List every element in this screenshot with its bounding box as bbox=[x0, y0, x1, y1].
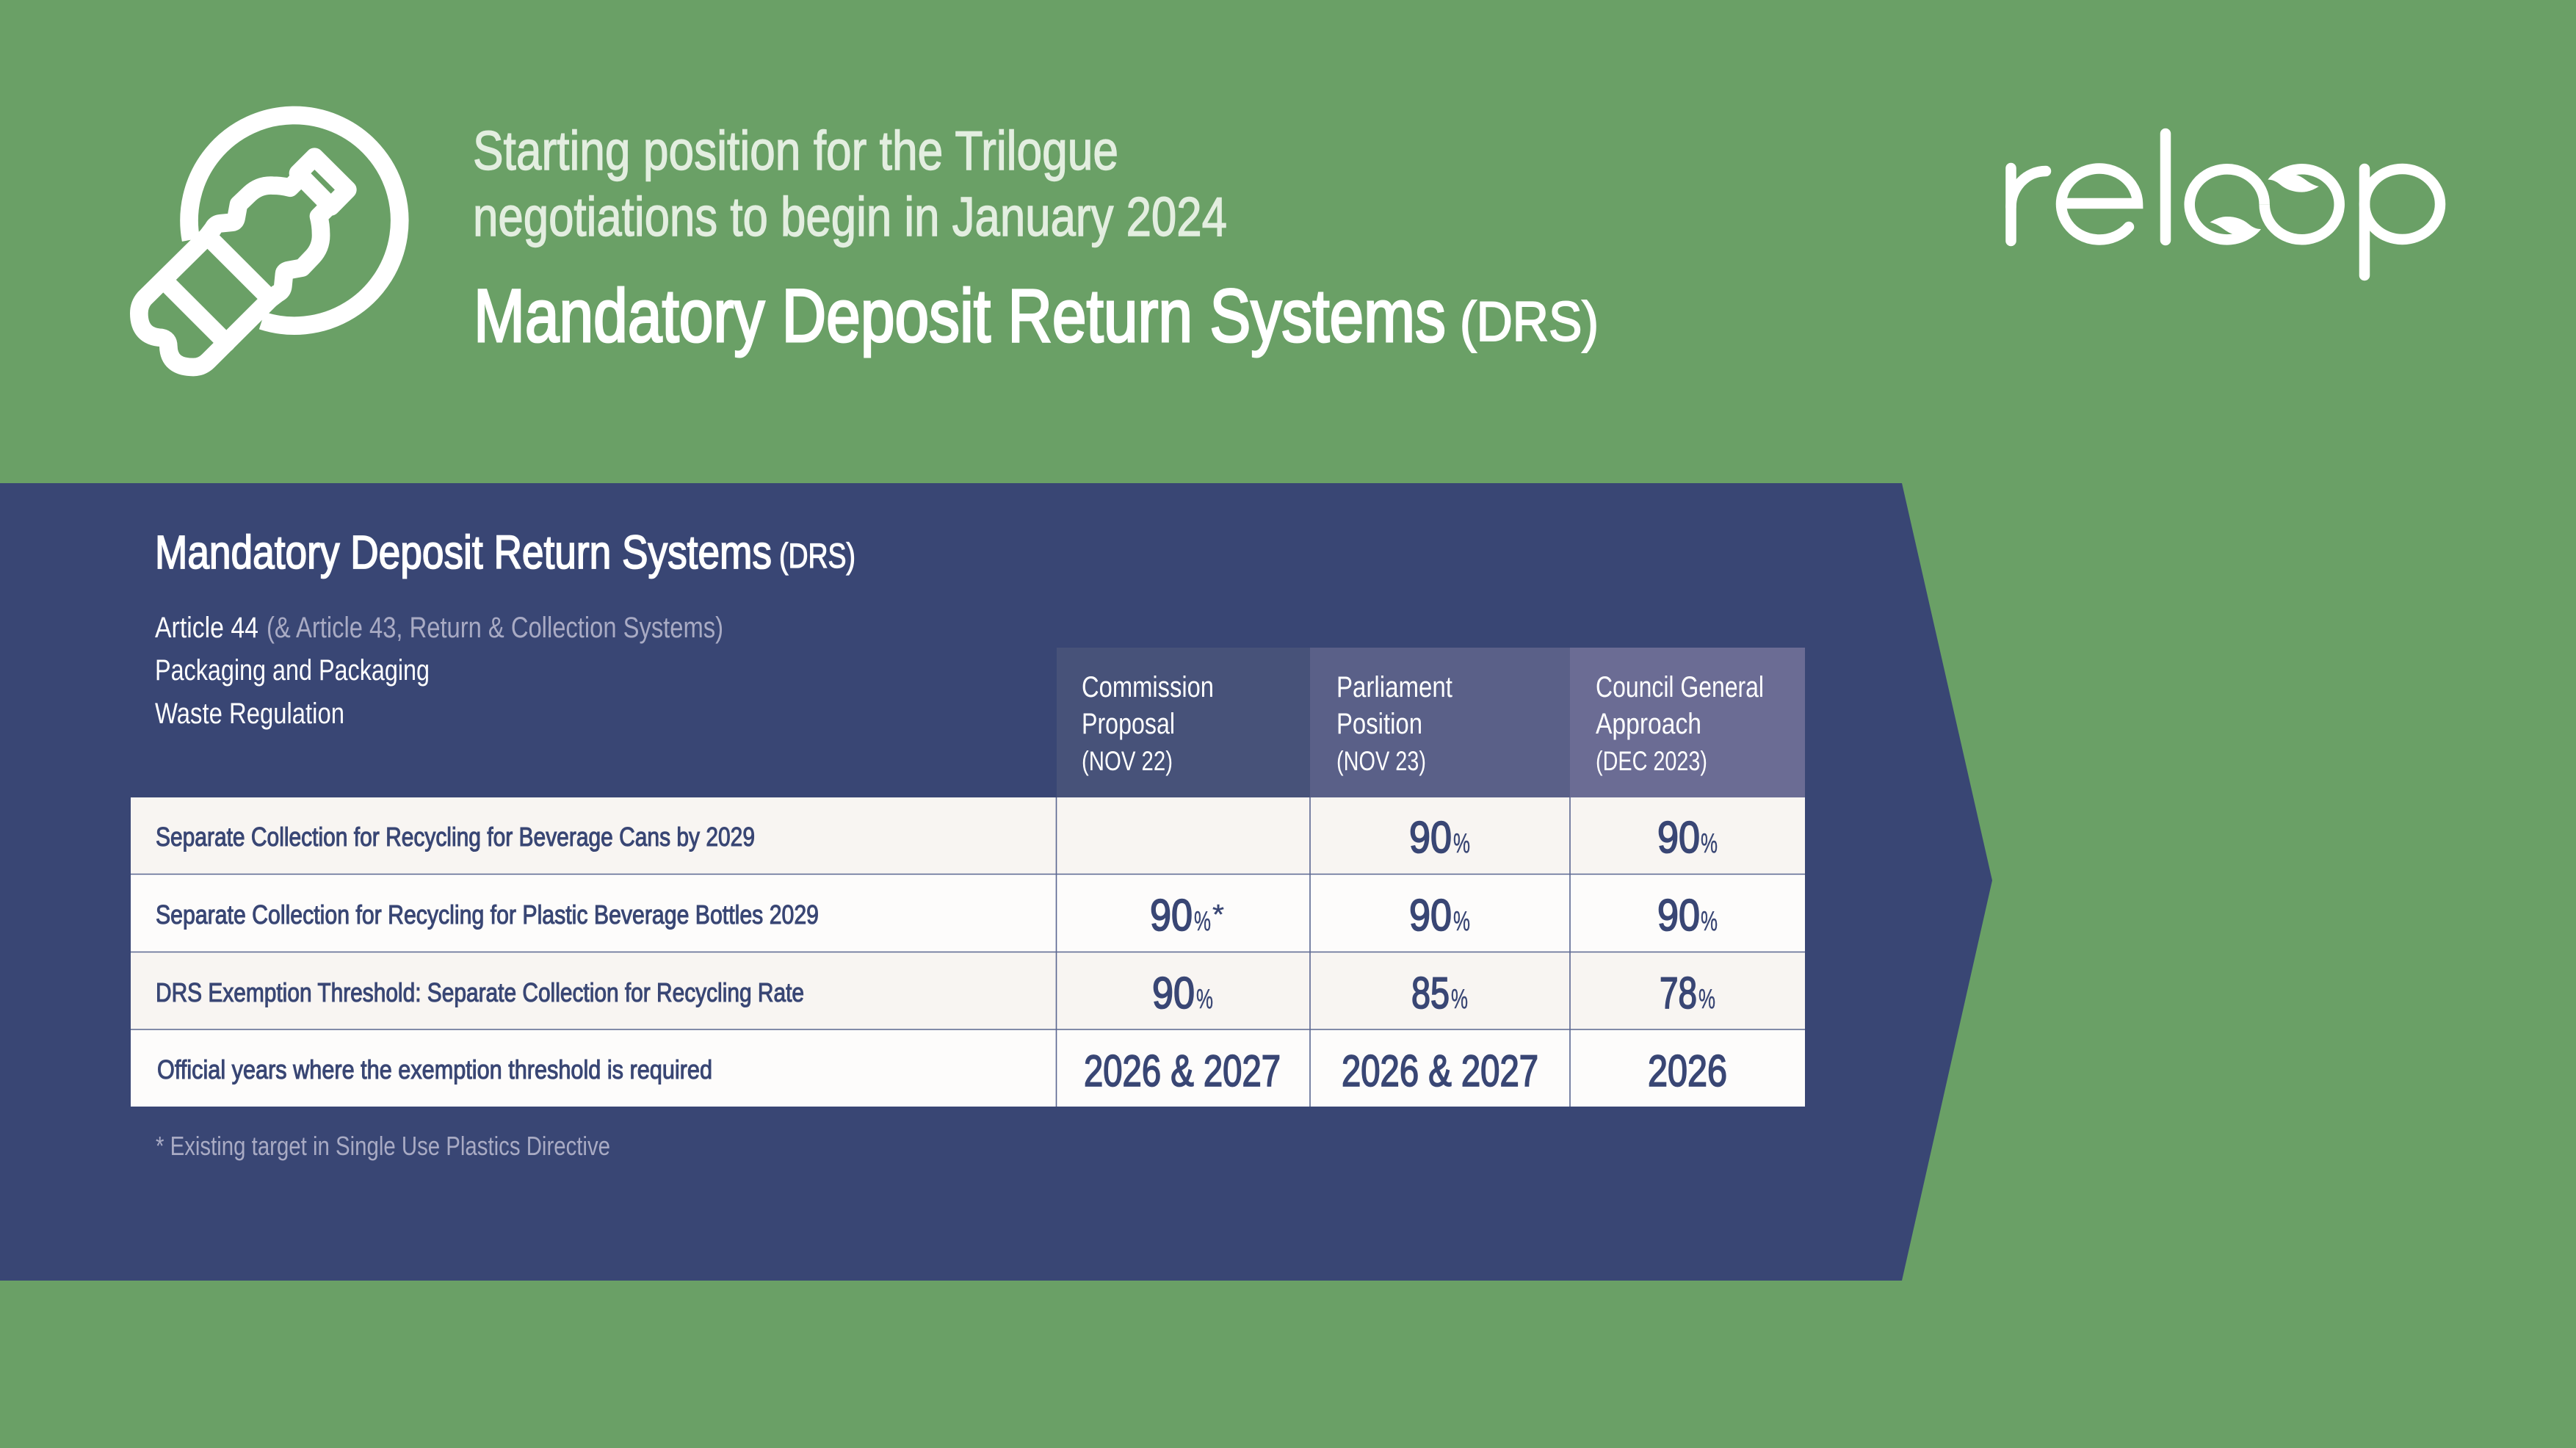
column header: Commission Proposal bbox=[1057, 648, 1310, 797]
panel heading: (DRS) bbox=[779, 536, 855, 575]
intro heading: Starting position for the Trilogue bbox=[473, 120, 1118, 181]
column header: Parliament Position: Position bbox=[1336, 708, 1422, 740]
icon: bottle in circle bbox=[139, 115, 399, 367]
row: beverage cans: % bbox=[1453, 828, 1470, 859]
row: plastic bottles: 90 bbox=[1657, 891, 1700, 940]
row: plastic bottles bbox=[131, 875, 1805, 952]
panel: navy arrow bbox=[0, 483, 1992, 1281]
row: plastic bottles: 90 bbox=[1409, 891, 1452, 940]
logo: reloop bbox=[2011, 134, 2440, 275]
row: plastic bottles: 90 bbox=[1150, 891, 1193, 940]
row: beverage cans: 90 bbox=[1409, 813, 1452, 862]
column header: Council General Approach: Council General bbox=[1596, 671, 1764, 703]
row: plastic bottles: % bbox=[1701, 906, 1718, 937]
row: official years: 2026 & 2027 bbox=[1342, 1046, 1538, 1096]
row: beverage cans bbox=[131, 797, 1805, 875]
row: exemption threshold: % bbox=[1698, 984, 1715, 1015]
article reference text: Waste Regulation bbox=[155, 698, 344, 730]
row: beverage cans: Separate Collection for Recycling for Beverage Cans by 2029 bbox=[156, 822, 755, 852]
row: exemption threshold: DRS Exemption Threshold: Separate Collection for Recycling Rate bbox=[156, 977, 804, 1007]
row: exemption threshold: 85 bbox=[1411, 969, 1450, 1018]
row: beverage cans: % bbox=[1701, 828, 1718, 859]
row: official years: Official years where the exemption threshold is required bbox=[157, 1054, 712, 1085]
table bbox=[131, 648, 1805, 1107]
column header: Parliament Position bbox=[1310, 648, 1570, 797]
row: official years: 2026 bbox=[1648, 1046, 1727, 1096]
column header: Commission Proposal: Commission bbox=[1082, 671, 1214, 703]
panel heading: Mandatory Deposit Return Systems bbox=[155, 526, 772, 579]
column header: Commission Proposal: (NOV 22) bbox=[1082, 746, 1173, 776]
row: exemption threshold: % bbox=[1451, 984, 1468, 1015]
row: plastic bottles: Separate Collection for Recycling for Plastic Beverage Bottles 2029 bbox=[156, 899, 819, 930]
intro heading: negotiations to begin in January 2024 bbox=[473, 186, 1227, 247]
article reference text: Packaging and Packaging bbox=[155, 654, 430, 687]
row: plastic bottles: % bbox=[1194, 906, 1211, 937]
article reference text bbox=[155, 612, 723, 730]
row: exemption threshold: % bbox=[1196, 984, 1213, 1015]
column header: Council General Approach bbox=[1570, 648, 1805, 797]
main title: (DRS) bbox=[1460, 291, 1599, 353]
row: exemption threshold: 90 bbox=[1152, 969, 1195, 1018]
article reference text: Article 44 bbox=[155, 612, 258, 644]
column header: Commission Proposal: Proposal bbox=[1082, 708, 1175, 740]
row: plastic bottles: % bbox=[1453, 906, 1470, 937]
row: exemption threshold bbox=[131, 952, 1805, 1029]
article reference text: (& Article 43, Return & Collection Systems) bbox=[267, 612, 723, 644]
row: beverage cans: 90 bbox=[1657, 813, 1700, 862]
intro heading bbox=[473, 120, 1227, 247]
column header: Parliament Position: Parliament bbox=[1336, 671, 1452, 703]
row: official years: 2026 & 2027 bbox=[1084, 1046, 1281, 1096]
row: official years bbox=[131, 1029, 1805, 1107]
main title: Mandatory Deposit Return Systems bbox=[474, 274, 1446, 358]
row: exemption threshold: 78 bbox=[1660, 969, 1697, 1018]
row: plastic bottles: * bbox=[1212, 899, 1224, 930]
column header: Parliament Position: (NOV 23) bbox=[1336, 746, 1426, 776]
column header: Council General Approach: Approach bbox=[1596, 708, 1701, 740]
footnote: * Existing target in Single Use Plastics Directive bbox=[156, 1131, 610, 1161]
column header: Council General Approach: (DEC 2023) bbox=[1596, 746, 1707, 776]
